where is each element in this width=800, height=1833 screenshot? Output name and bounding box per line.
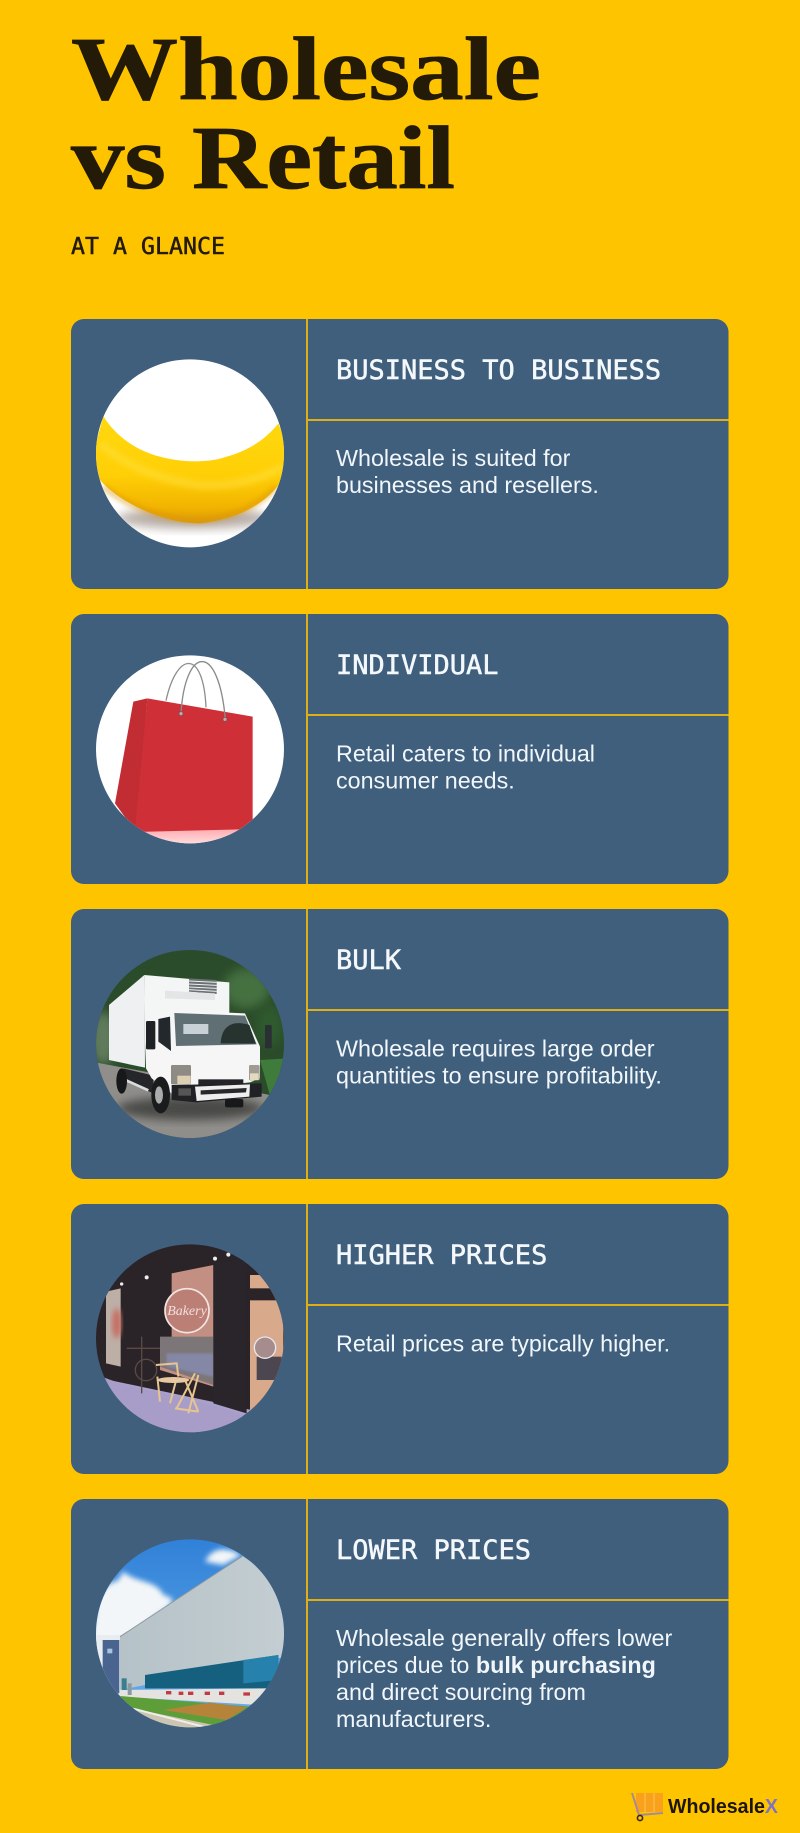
title <box>71 20 541 208</box>
text: business to business: businesses and resellers. <box>336 472 599 498</box>
panel: business to business <box>71 319 728 589</box>
logo: WholesaleX: WholesaleX <box>668 1795 778 1818</box>
text: lower prices: bulk purchasing <box>476 1652 656 1678</box>
heading: individual: INDIVIDUAL <box>336 650 499 681</box>
text: individual: Retail caters to individual <box>336 740 595 766</box>
subtitle: AT A GLANCE <box>71 233 225 260</box>
title: vs <box>71 109 166 208</box>
icon: red shopping bag photo <box>93 653 287 847</box>
heading: business to business: BUSINESS TO BUSINESS <box>336 355 661 386</box>
text: higher prices: Retail prices are typically higher. <box>336 1330 670 1356</box>
icon: storefront photo <box>93 1242 287 1437</box>
title: Wholesale <box>71 20 541 119</box>
text: lower prices: and direct sourcing from <box>336 1679 586 1705</box>
icon: cart with book <box>632 1793 663 1821</box>
heading: higher prices: HIGHER PRICES <box>336 1240 547 1271</box>
text: bulk: quantities to ensure profitability. <box>336 1062 662 1088</box>
panel: higher prices <box>71 1204 728 1474</box>
icon: banana photo <box>93 357 290 550</box>
icon: delivery truck photo <box>90 947 288 1143</box>
icon: warehouse photo <box>90 1537 287 1733</box>
icon: storefront photo: Bakery <box>167 1304 208 1319</box>
panel: individual <box>71 614 728 884</box>
text: lower prices: Wholesale generally offers lower <box>336 1625 672 1651</box>
text: lower prices: manufacturers. <box>336 1706 491 1732</box>
text: individual: consumer needs. <box>336 768 515 794</box>
title: Retail <box>192 109 455 208</box>
heading: bulk: BULK <box>336 945 402 976</box>
heading: lower prices: LOWER PRICES <box>336 1535 531 1566</box>
panel: lower prices <box>71 1499 728 1769</box>
panel: bulk <box>71 909 728 1179</box>
text: lower prices: prices due to <box>336 1652 476 1678</box>
text: business to business: Wholesale is suited for <box>336 445 571 471</box>
logo: WholesaleX <box>632 1793 778 1821</box>
text: bulk: Wholesale requires large order <box>336 1036 655 1062</box>
